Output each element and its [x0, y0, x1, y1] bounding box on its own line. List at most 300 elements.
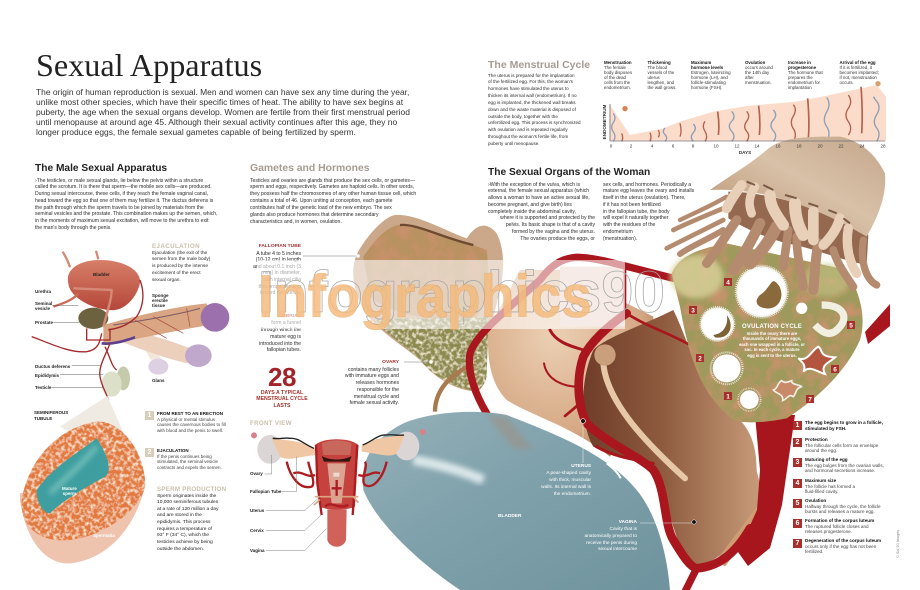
- callout: vagina: VAGINA: [619, 520, 637, 525]
- illustration: fimbriae bulb over the ovary: [667, 137, 885, 290]
- legend item 4: fluid-filled cavity.: [805, 489, 838, 494]
- label: ovary, front view: Ovary: [250, 471, 263, 476]
- legend item 2: around the egg.: [805, 448, 837, 453]
- cycle stage: thickening: lengthen, and: [648, 80, 674, 85]
- callout: fimbriae: through which the: [261, 327, 301, 333]
- text: the menstrual cycle: outside the body, together with the: [488, 114, 558, 119]
- chart axis: 18: [796, 144, 802, 148]
- follicle 6: [798, 347, 835, 374]
- text: gametes and hormones: characteristics and, in women, ovulation.: [250, 219, 342, 225]
- illustration: ovary callout numbers: 3: [691, 308, 695, 314]
- label: sponge erectile tissue: Sponge: [152, 292, 168, 298]
- callout: fallopian tube: [253, 244, 301, 296]
- callout: vagina: Cavity that is: [610, 527, 637, 532]
- text: ejaculation: [152, 250, 210, 283]
- text: female organs, first column: ›With the exception of the vulva, which is: [488, 182, 580, 188]
- callout: uterus: A pear-shaped cavity: [546, 471, 591, 476]
- legend item 7: 7: [796, 540, 799, 547]
- cycle stage: thickening: Thickening: [648, 60, 671, 65]
- big number: 28 days: DAYS A TYPICAL: [261, 390, 303, 396]
- callout: fallopian tube: toward the uterus.: [260, 290, 301, 296]
- label: sponge erectile tissue: [152, 292, 168, 308]
- callout: uterus: walls. Its internal wall is: [541, 485, 591, 490]
- callout: fallopian tube: mm) in diameter,: [263, 270, 301, 276]
- illustration: ovary callout numbers: 7: [808, 396, 812, 404]
- prostate: [78, 308, 108, 329]
- label: tubule wall: Spermatia: [93, 533, 115, 538]
- vagina: [327, 509, 347, 547]
- step 1: from rest to an erection: causes the cavernous bodies to fill: [157, 422, 226, 427]
- illustration: ovary with ovulation cycle: [670, 243, 863, 422]
- legend item 6: The ruptured follicle closes and: [805, 524, 869, 529]
- text: the menstrual cycle: throughout the woman's fertile life, from: [488, 134, 568, 139]
- cycle stage: thickening: vessels of the: [648, 70, 674, 75]
- intro paragraph: until menopause at around age 45. Although their sexual activity continues after this age, they no: [36, 117, 397, 127]
- legend item 5: Halfway through the cycle, the follicle: [805, 504, 881, 509]
- legend item 2: Protection: [805, 437, 828, 442]
- text: the male sexual apparatus: in the moments of maximum sexual excitation, will move to the urethra to exit: [35, 218, 209, 224]
- illustration: ovary callout numbers: 2: [698, 356, 702, 362]
- text: the menstrual cycle: hormones have stimulated the uterus to: [488, 86, 569, 91]
- illustration: ovary callout numbers: 5: [849, 322, 853, 330]
- heading: front view: FRONT VIEW: [250, 420, 292, 426]
- heading: gametes and hormones: Gametes and Hormones: [250, 162, 370, 174]
- intro paragraph: [36, 87, 410, 137]
- legend item 2: [793, 437, 878, 453]
- text: female organs, first column: completely inside the abdominal cavity,: [488, 208, 576, 214]
- text: the male sexual apparatus: During sexual intercourse, these cells, if they reach the female vaginal canal,: [35, 191, 208, 197]
- label: seminal vesicle: Seminal: [35, 300, 52, 306]
- illustration: open funnel of the fallopian tube and ovary: [353, 215, 503, 412]
- testicle: [102, 366, 130, 397]
- step 1: from rest to an erection: with blood and the penis to swell.: [157, 428, 223, 433]
- text: the menstrual cycle: The uterus is prepared for the implantation: [488, 72, 575, 78]
- callout: ovary: female sexual activity.: [350, 400, 399, 406]
- text: the menstrual cycle: puberty until menopause.: [488, 141, 540, 146]
- legend item 7: [793, 538, 881, 554]
- legend item 1: The egg begins to grow in a follicle,: [805, 420, 883, 425]
- text: female organs, first column: allows a woman to have an active sexual life,: [488, 195, 590, 201]
- label: seminal vesicle: [35, 300, 52, 311]
- ducts and vessels: [32, 280, 143, 400]
- cycle stage: menstruation: endometrium.: [604, 85, 631, 90]
- cycle stage: increase in progesterone: implantation: [788, 85, 812, 90]
- cycle stage: maximum hormone levels: follicle-stimulating: [691, 80, 726, 85]
- label: epididymis: Epididymis: [35, 372, 59, 378]
- cycle stage: thickening: the wall grows.: [648, 85, 677, 90]
- cycle stage: menstruation: The female: [604, 65, 626, 70]
- legend item 5: 5: [796, 500, 799, 507]
- intro paragraph: longer produce eggs, the female sexual gametes capable of being fertilized by sperm.: [36, 127, 356, 137]
- chart axis: 22: [838, 144, 844, 148]
- text: female organs, second column: (menstruation).: [603, 236, 637, 242]
- text: the menstrual cycle: of the fertilized egg. For this, the woman's: [488, 79, 573, 84]
- text: female organs, first column: [488, 182, 595, 242]
- chart axis: 16: [775, 144, 781, 148]
- cycle stage: menstruation: cells from the: [604, 80, 630, 85]
- cycle stage: increase in progesterone: The hormone that: [788, 70, 823, 75]
- cycle stage: thickening: [648, 60, 677, 90]
- cycle stage: menstruation: body disposes: [604, 70, 632, 75]
- cycle stage: arrival of the egg: occurs.: [840, 80, 854, 85]
- text: female organs, first column: formed by the vagina and the uterus.: [512, 229, 595, 235]
- cycle stage: ovulation: after: [745, 75, 754, 80]
- title: Sexual Apparatus: [36, 47, 262, 83]
- bladder: [68, 260, 140, 310]
- text: gametes and hormones: contains a total of 46. Upon uniting at conception, each gamete: [250, 198, 392, 204]
- callout: ovary: [344, 360, 399, 406]
- callout: fimbriae: fallopian tubes.: [267, 347, 301, 353]
- cycle stage: increase in progesterone: endometrium for: [788, 80, 820, 85]
- callout: uterus: with thick, muscular: [549, 478, 591, 483]
- ovulation cycle caption: OVULATION CYCLE: [742, 324, 802, 330]
- text: the menstrual cycle: thicken its internal wall (endometrium). If no: [488, 93, 577, 98]
- legend item 3: [793, 457, 884, 473]
- legend item 6: 6: [796, 520, 799, 527]
- legend item 5: Ovulation: [805, 498, 826, 503]
- cycle stage: maximum hormone levels: Maximum: [691, 60, 711, 65]
- legend item 4: The follicle has formed a: [805, 484, 855, 489]
- step 2: ejaculation: If the penis continues being: [157, 454, 212, 459]
- illustration: ovary callout numbers: [689, 278, 855, 404]
- callout: uterus: UTERUS: [571, 464, 591, 469]
- legend item 1: [793, 420, 883, 431]
- legend item 5: bursts and releases a mature egg.: [805, 509, 875, 514]
- illustration: uterus body, cavity and arteries: [469, 257, 768, 590]
- uterus body: [315, 439, 358, 510]
- chart axis: 8: [692, 144, 695, 148]
- step 1: from rest to an erection: [145, 411, 226, 433]
- heading: the male sexual apparatus: The Male Sexual Apparatus: [35, 163, 167, 174]
- callout: fallopian tube: A tube 4 to 5 inches: [256, 251, 301, 257]
- cycle stage: arrival of the egg: If it is fertilized, it: [840, 65, 872, 70]
- text: female organs, second column: in the fallopian tube, the body: [603, 208, 670, 214]
- label: prostate: Prostate: [35, 320, 53, 324]
- label: sponge erectile tissue: tissue: [152, 303, 165, 308]
- cycle stage: maximum hormone levels: hormone levels: [691, 65, 723, 70]
- text: ejaculation: excitement of the erect: [152, 271, 201, 276]
- label: ductus deferens: Ductus deferens: [35, 364, 70, 368]
- legend item 4: [793, 478, 856, 494]
- callout: ovary: responsible for the: [357, 387, 399, 393]
- text: ejaculation: semen from the male body): [152, 257, 210, 262]
- text: female organs, second column: mature egg leaves the ovary and installs: [603, 188, 694, 194]
- step 2: ejaculation: [145, 448, 222, 470]
- text: the menstrual cycle: [488, 72, 581, 146]
- label: fallopian tube, front view: Fallopian Tube: [250, 488, 281, 494]
- cycle stage: ovulation: Ovulation: [745, 60, 765, 65]
- callout: fimbriae: FIMBRIAE: [277, 314, 301, 318]
- illustration: ovary callout numbers: 1: [726, 394, 730, 400]
- callout: vagina: receive the penis during: [586, 541, 637, 546]
- text: sperm production: 93° F (34° C), which the: [157, 533, 209, 538]
- faded penis positions: [113, 327, 212, 375]
- callout: uterus: [541, 464, 591, 497]
- illustration: cross-section of seminiferous tubule: [20, 396, 145, 563]
- follicle 2: [711, 352, 743, 384]
- text: female organs, first column: pelvis. Its basic shape is that of a cavity: [506, 222, 595, 228]
- follicle 7: [773, 381, 802, 401]
- callout: ovary: contains many follicles: [348, 367, 399, 373]
- watermark band: Infographics90: [258, 260, 665, 325]
- callout: vagina: sexual intercourse: [598, 547, 637, 552]
- legend item 6: releases progesterone.: [805, 529, 852, 534]
- cycle stage: arrival of the egg: [840, 60, 879, 85]
- label: sponge erectile tissue: erectile: [152, 298, 168, 303]
- cycle stage: ovulation: menstruation.: [745, 80, 772, 85]
- chart axis: DAYS: [739, 150, 751, 155]
- chart axis: 24: [859, 144, 865, 148]
- chart axis: ENDOMETRIUM: [602, 104, 607, 139]
- callout: ovary: menstrual cycle and: [354, 394, 399, 400]
- text: female organs, first column: become pregnant, and give birth) lies: [488, 202, 572, 208]
- illustration: ovary callout numbers: 6: [833, 366, 837, 374]
- chart axis: 4: [651, 144, 654, 148]
- heading: the menstrual cycle: The Menstrual Cycle: [488, 59, 590, 71]
- text: the menstrual cycle: down and the waste material is disposed of: [488, 107, 576, 112]
- text: female organs, first column: external, the female sexual apparatus (which: [488, 188, 589, 194]
- legend item 5: [793, 498, 881, 514]
- callout: vagina: [584, 520, 637, 552]
- text: sperm production: [157, 494, 218, 552]
- label: tubule interior: Mature: [62, 486, 77, 491]
- ovulation cycle caption: sac. In each cycle, a mature: [744, 347, 800, 352]
- chart axis: 20: [817, 144, 823, 148]
- step 1: from rest to an erection: A physical or mental stimulus: [157, 417, 215, 422]
- cycle stage: ovulation: occurs around: [745, 65, 773, 70]
- legend item 4: Maximum size: [805, 478, 836, 483]
- text: female organs, second column: with the residues of the: [603, 222, 655, 228]
- label leaders: [265, 455, 327, 550]
- released egg: [796, 303, 807, 314]
- big number: 28 days: MENSTRUAL CYCLE: [256, 396, 308, 402]
- text: the male sexual apparatus: called the scrotum. It is there that sperm—the mobile sex cells—are produced.: [35, 184, 212, 190]
- cycle stage: arrival of the egg: if not, menstruation: [840, 75, 877, 80]
- follicle 4: [736, 266, 787, 317]
- ovulation cycle caption: [739, 324, 805, 358]
- text: gametes and hormones: [250, 178, 416, 225]
- step 2: ejaculation: 2: [148, 449, 151, 456]
- ovulation cycle caption: Inside the ovary there are: [747, 331, 797, 336]
- text: female organs, second column: itself in the uterus (ovulation). There,: [603, 195, 686, 201]
- text: gametes and hormones: glands also produce hormones that determine secondary: [250, 212, 379, 218]
- cycle stage: ovulation: [745, 60, 773, 85]
- watermark band: Infographics: [258, 263, 592, 330]
- text: female organs, second column: [603, 182, 694, 242]
- cycle stage: ovulation: the 14th day: [745, 70, 769, 75]
- callout: fallopian tube: FALLOPIAN TUBE: [259, 244, 301, 249]
- big number: 28 days: [256, 362, 308, 409]
- callout: fallopian tube: with internal cilia: [264, 277, 301, 283]
- callout: fimbriae: mature egg is: [270, 334, 301, 340]
- big number: 28 days: LASTS: [273, 403, 290, 409]
- text: the male sexual apparatus: ›The testicles, or male sexual glands, lie below the pelvis within a structure: [35, 178, 203, 184]
- text: ejaculation: is produced by the intense: [152, 264, 208, 269]
- legend item 2: The follicular cells form an envelope: [805, 443, 878, 448]
- text: the menstrual cycle: unfertilized egg. This process is synchronized: [488, 120, 581, 125]
- callout: ovary: releases hormones: [356, 380, 399, 386]
- text: female organs, second column: sex cells, and hormones. Periodically a: [603, 182, 691, 188]
- text: the male sexual apparatus: the man's body through the penis.: [35, 225, 112, 231]
- cycle stage: increase in progesterone: [788, 60, 823, 90]
- step 1: from rest to an erection: FROM REST TO AN ERECTION: [157, 411, 223, 416]
- ovulation cycle caption: egg is sent to the uterus.: [747, 353, 797, 358]
- cycle stage: menstruation: [604, 60, 632, 90]
- callout: fallopian tube: that propel the egg: [259, 284, 301, 290]
- ovulation cycle caption: each one wrapped in a follicle, or: [739, 342, 805, 347]
- text: ejaculation: sexual organ.: [152, 278, 181, 283]
- legend item 6: [793, 518, 874, 534]
- callout: fimbriae: introduced into the: [259, 340, 301, 346]
- text: the male sexual apparatus: head toward the egg so that one of them may fertilize it. The ductus deferens is: [35, 198, 213, 204]
- text: female organs, second column: if it has not been fertilized: [603, 202, 661, 208]
- text: gametes and hormones: sperm and eggs, respectively. Gametes are haploid cells. In other words,: [250, 184, 414, 190]
- legend item 3: and hormonal secretions increase.: [805, 468, 875, 473]
- label: tubule interior: sperm: [63, 491, 76, 496]
- cycle stage: maximum hormone levels: [691, 60, 731, 90]
- label: seminiferous tubule: SEMINIFEROUS: [34, 410, 68, 415]
- cycle stage: arrival of the egg: Arrival of the egg: [840, 60, 876, 65]
- step 1: from rest to an erection: 1: [148, 412, 151, 419]
- follicle 5: [815, 305, 844, 333]
- text: the male sexual apparatus: seminal vesicles and the prostate. This combination makes up the semen, which,: [35, 211, 218, 217]
- text: female organs, first column: The ovaries produce the eggs, or: [520, 236, 595, 242]
- text: female organs, second column: will expel it naturally together: [603, 215, 668, 221]
- step 2: ejaculation: EJACULATION: [157, 448, 189, 453]
- label: cervix, front view: Cervix: [250, 528, 264, 532]
- chart axis: 0: [610, 144, 613, 148]
- cycle stage: thickening: The blood: [648, 65, 667, 70]
- cycle stage: maximum hormone levels: hormone (FSH).: [691, 85, 722, 90]
- callout: fallopian tube: and about 0.1 inch (3: [253, 264, 301, 270]
- cycle stage: maximum hormone levels: Estrogen, luteinizing: [691, 70, 731, 75]
- text: sperm production: requires a temperature of: [157, 527, 212, 532]
- legend item 3: The egg bulges from the ovarian walls,: [805, 463, 884, 468]
- follicle 3: [701, 307, 734, 341]
- legend item 7: fertilized.: [805, 549, 823, 554]
- text: the male sexual apparatus: [35, 178, 218, 231]
- illustration: bladder: [363, 412, 670, 590]
- follicle 1: [738, 388, 761, 411]
- legend item 2: 2: [796, 439, 799, 446]
- label: uterus, front view: Uterus: [250, 508, 264, 512]
- text: the menstrual cycle: egg is implanted, the thickened wall breaks: [488, 100, 576, 105]
- callout: vagina: anatomically prepared to: [584, 534, 637, 539]
- callout: fimbriae: form a funnel: [271, 320, 301, 326]
- left ovary and tube: [251, 432, 315, 464]
- label: glans: Glans: [152, 378, 165, 382]
- legend item 7: occurs only if the egg has not been: [805, 544, 876, 549]
- label leaders: [52, 305, 103, 387]
- chart axis: 2: [630, 144, 633, 148]
- legend item 6: Formation of the corpus luteum: [805, 518, 874, 523]
- label: bladder: BLADDER: [498, 514, 521, 519]
- cycle stage: increase in progesterone: prepares the: [788, 75, 813, 80]
- intro paragraph: unlike most other species, which have their specific times of heat. The ability to have sex begins at: [36, 97, 403, 107]
- heading: the sexual organs of the woman: The Sexual Organs of the Woman: [488, 167, 650, 178]
- text: sperm production: testicles achieve by being: [157, 540, 213, 545]
- cycle stage: increase in progesterone: progesterone: [788, 65, 816, 70]
- legend item 3: Maturing of the egg: [805, 457, 848, 462]
- text: the male sexual apparatus: the path through which the sperm travels to be joined by materials from the: [35, 204, 204, 210]
- text: sperm production: epididymis. This process: [157, 520, 210, 525]
- chart axis: 12: [734, 144, 740, 148]
- artery beside the ovary: [865, 304, 890, 344]
- label: seminiferous tubule: TUBULE: [34, 416, 52, 421]
- leaders: fallopian tube, ovary, uterus and vagina: [303, 254, 696, 524]
- legend item 3: 3: [796, 459, 799, 466]
- label: testicle: Testicle: [35, 385, 51, 390]
- right ovary and tube: [362, 429, 426, 460]
- text: sperm production: and are stored in the: [157, 513, 202, 518]
- text: gametes and hormones: Testicles and ovaries are glands that produce the sex cells, or gametes—: [250, 178, 415, 184]
- text: the menstrual cycle: with ovulation and is repeated regularly: [488, 127, 568, 132]
- intro paragraph: The origin of human reproduction is sexual. Men and women can have sex any time during the year,: [36, 87, 409, 97]
- text: ejaculation: Ejaculation (the exit of the: [152, 250, 207, 256]
- chart: endometrium thickness through the menstrual cycle: [609, 81, 886, 141]
- legend item 1: 1: [796, 422, 799, 429]
- callout: fimbriae: [259, 314, 301, 353]
- legend item 1: stimulated by FSH.: [805, 426, 846, 431]
- step 2: ejaculation: contracts and expels the semen.: [157, 465, 222, 470]
- big number: 28 days: 28: [268, 362, 296, 392]
- legend item 7: Degeneration of the corpus luteum: [805, 538, 881, 543]
- cycle stage: maximum hormone levels: hormone (LH), and: [691, 75, 728, 80]
- cycle stage: thickening: uterus: [648, 75, 660, 80]
- callout: uterus: the endometrium.: [554, 492, 591, 497]
- text: female organs, second column: endometrium: [603, 229, 633, 235]
- ovulation cycle caption: thousands of immature eggs,: [743, 336, 801, 341]
- label: tubule interior: [62, 486, 77, 496]
- step 2: ejaculation: stimulated, the seminal vesicle: [157, 459, 218, 464]
- heading: ejaculation: EJACULATION: [152, 242, 200, 250]
- text: sperm production: 10,000 seminiferous tubules: [157, 500, 218, 505]
- text: sperm production: outside the abdomen.: [157, 547, 204, 552]
- image credit: © Sol 90 Images: [896, 530, 900, 558]
- callout: fallopian tube: (10-12 cm) in length: [256, 257, 301, 263]
- chart axis: 10: [713, 144, 719, 148]
- label: vagina, front view: Vagina: [250, 548, 265, 552]
- text: gametes and hormones: contributes half of the genetic load of the new embryo. The sex: [250, 205, 392, 211]
- label: bladder: Bladder: [93, 272, 110, 276]
- text: sperm production: Sperm originates inside the: [157, 494, 216, 498]
- chart axis: 14: [754, 144, 760, 148]
- legend item 4: 4: [796, 480, 799, 487]
- illustration: front view of the uterus: [251, 429, 426, 550]
- text: gametes and hormones: they possess half the chromosomes of any other human tissue cell, which: [250, 191, 416, 197]
- label: seminal vesicle: vesicle: [35, 306, 50, 311]
- label: seminiferous tubule: [34, 410, 68, 421]
- heading: sperm production: SPERM PRODUCTION: [157, 486, 226, 492]
- callout: ovary: OVARY: [382, 360, 399, 365]
- erect penis: [102, 303, 229, 344]
- text: sperm production: at a rate of 120 million a day: [157, 507, 218, 512]
- callout: ovary: with immature eggs and: [345, 373, 399, 379]
- main artery beside the legend: [738, 415, 795, 566]
- illustration: ovary callout numbers: 4: [726, 280, 730, 286]
- illustration: male reproductive organs: [32, 251, 229, 400]
- cycle stage: menstruation: Menstruation: [604, 60, 632, 65]
- cycle stage: increase in progesterone: Increase in: [788, 60, 811, 65]
- cycle stage: arrival of the egg: becomes implanted;: [840, 70, 879, 75]
- text: female organs, first column: where it is supported and protected by the: [500, 215, 595, 221]
- chart axis: 28: [880, 144, 886, 148]
- vessels: [287, 445, 387, 515]
- intro paragraph: puberty, the age when the sexual organs develop. Women are fertile from their first menstrual period: [36, 107, 410, 117]
- chart axis: 6: [672, 144, 675, 148]
- cycle stage: menstruation: of the dead: [604, 75, 626, 80]
- male anatomy labels: Urethra: [35, 288, 51, 294]
